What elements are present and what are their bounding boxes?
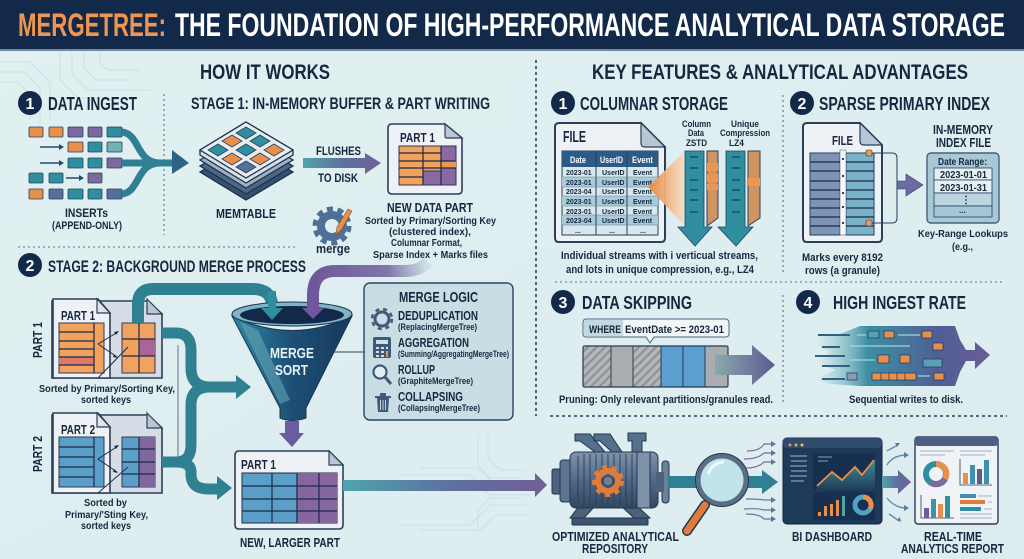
labels: unique compression: Compression — [720, 128, 770, 138]
label: real-time analytics report: REAL-TIME — [924, 529, 982, 544]
caption: part 1: Sorted by Primary/Sorting Key, — [39, 383, 175, 395]
index table: 2023-01-31 — [940, 182, 987, 194]
item: aggregation: (Summing/AggregatingMergeTree) — [398, 349, 509, 359]
columnar file document: 2023-01 — [566, 170, 592, 177]
caption: pruning: Pruning: Only relevant partitions/granules read. — [559, 394, 773, 406]
new larger part document: PART 1 — [241, 458, 276, 472]
step 2: background merge heading: 2 — [26, 258, 35, 275]
label: optimized analytical repository — [552, 529, 679, 556]
text: new data part description: Sorted by Primary/Sorting Key — [365, 215, 496, 227]
labels: unique compression: LZ4 — [729, 138, 744, 148]
caption: columnar storage: Individual streams with i verticual streams, — [561, 250, 758, 262]
feature 1: columnar storage heading — [551, 91, 728, 115]
columnar file document: UserID — [602, 170, 625, 177]
columnar file document: Event — [632, 155, 653, 165]
columnar file document: 2023-01 — [566, 199, 592, 206]
query box: WHERE — [589, 324, 621, 336]
columnar file document: UserID — [602, 189, 625, 196]
arrow: engine through magnifier to dashboard — [668, 470, 778, 494]
title: MERGETREE: — [18, 7, 166, 43]
columnar file document: ... — [640, 228, 646, 235]
caption: key-range lookups — [918, 228, 1008, 253]
step 1: data ingest heading: 1 — [26, 96, 35, 113]
arrow heads: parts into merge — [217, 305, 283, 500]
caption: part 2: Sorted by — [84, 497, 127, 509]
labels: column data: ZSTD — [686, 138, 707, 148]
sparse index file document — [803, 123, 882, 242]
partition bar — [583, 346, 728, 387]
caption: columnar storage: and lots in unique compression, e.g., LZ4 — [566, 264, 755, 276]
input part 2: PART 2 — [61, 423, 95, 437]
item: collapsing: (CollapsingMergeTree) — [398, 403, 480, 413]
label: inserts: INSERTs — [65, 208, 108, 220]
icon: merge gear: merge — [316, 242, 350, 256]
index table: Date Range: — [938, 157, 987, 168]
columnar file document: FILE — [563, 129, 586, 146]
column streams — [678, 151, 760, 246]
item: collapsing — [375, 389, 480, 413]
caption: part 2 — [65, 497, 148, 532]
columnar file document: Event — [633, 180, 653, 187]
caption: key-range lookups: Key-Range Lookups — [918, 228, 1008, 240]
input part 1 — [52, 299, 162, 378]
feature 4: high ingest heading: HIGH INGEST RATE — [833, 293, 966, 313]
feature 1: columnar storage heading: 1 — [559, 96, 568, 113]
step 1: data ingest heading — [18, 91, 137, 115]
item: rollup — [374, 362, 473, 386]
index table — [927, 153, 999, 223]
icon: orange gear — [594, 467, 622, 495]
label: optimized analytical repository: OPTIMIZED ANALYTICAL — [552, 529, 679, 544]
caption: sequential writes: Sequential writes to disk. — [849, 394, 963, 406]
arrows: parts into merge — [138, 289, 272, 489]
columnar file document: Event — [633, 218, 653, 225]
caption: part 2: sorted keys — [81, 520, 131, 532]
columnar file document: Date — [570, 155, 586, 165]
wisps to report — [887, 443, 909, 522]
label: inserts: (APPEND-ONLY) — [52, 220, 122, 232]
arrow: dashboard to report — [882, 470, 911, 494]
step 2: background merge heading — [18, 253, 306, 277]
feature 4: high ingest heading: 4 — [804, 295, 813, 312]
item: rollup: (GraphiteMergeTree) — [398, 376, 473, 386]
icon: memtable stack — [200, 122, 293, 200]
caption: key-range lookups: (e.g., — [952, 241, 973, 253]
columnar file document: ... — [609, 228, 615, 235]
item: deduplication — [372, 308, 478, 332]
columnar file document: 2023-01 — [566, 180, 592, 187]
caption: marks every 8192: Marks every 8192 — [802, 252, 883, 264]
label: bi dashboard: BI DASHBOARD — [792, 529, 872, 544]
columnar file document: 2023-01 — [566, 209, 592, 216]
columnar file document: Event — [633, 170, 653, 177]
item: collapsing: COLLAPSING — [398, 389, 463, 404]
new larger part document — [235, 451, 343, 529]
caption: part 2: Primary/'Sting Key, — [65, 509, 148, 521]
arrow: pruning — [715, 345, 775, 385]
columnar file document: 2023-04 — [566, 218, 592, 225]
label: part 1 vertical: PART 1 — [31, 322, 45, 358]
columnar file document — [555, 123, 665, 242]
item: deduplication: DEDUPLICATION — [398, 308, 478, 323]
header banner — [0, 0, 1024, 51]
item: aggregation: AGGREGATION — [398, 335, 469, 350]
icon: high ingest stream — [815, 326, 990, 386]
text: new data part description: (clustered index), — [389, 226, 471, 238]
text: new data part description: Sparse Index + Marks files — [373, 249, 488, 261]
new data part document — [388, 124, 462, 194]
icon: analytics report — [915, 437, 998, 524]
funnel: merge sort: MERGE — [270, 345, 314, 362]
step 1: data ingest heading: DATA INGEST — [48, 94, 137, 114]
labels: unique compression: Unique — [731, 119, 759, 129]
panel: merge logic — [364, 283, 513, 420]
arrow: marks to in-memory index — [872, 153, 923, 223]
columnar file document: UserID — [602, 218, 625, 225]
funnel: merge sort — [232, 291, 352, 420]
arrow: new part to repository — [343, 473, 547, 497]
arrow: flushes to disk: FLUSHES — [316, 144, 361, 158]
arrow: merge signal into funnel — [302, 262, 428, 319]
step 2: background merge heading: STAGE 2: BACKGROUND MERGE PROCESS — [48, 257, 306, 276]
section heading: how it works: HOW IT WORKS — [200, 61, 330, 84]
text: new data part description: NEW DATA PART — [387, 200, 473, 215]
item: aggregation — [373, 335, 509, 359]
feature 3: data skipping heading: 3 — [559, 295, 568, 312]
arrow: flushes to disk: TO DISK — [318, 171, 358, 185]
labels: column data — [682, 119, 711, 148]
item: deduplication: (ReplacingMergeTree) — [398, 322, 477, 332]
query box — [583, 319, 729, 343]
caption: marks every 8192 — [802, 252, 883, 277]
label: new larger part: NEW, LARGER PART — [240, 535, 340, 550]
feature 4: high ingest heading — [796, 290, 966, 314]
label: in-memory index file: IN-MEMORY — [933, 123, 994, 137]
labels: column data: Column — [682, 119, 711, 129]
funnel: merge sort: SORT — [275, 362, 308, 379]
columnar file document: Event — [633, 199, 653, 206]
columnar file document: UserID — [602, 199, 625, 206]
columnar file document: Event — [633, 189, 653, 196]
label: memtable: MEMTABLE — [216, 206, 276, 221]
text: new data part description: Columnar Format, — [391, 237, 462, 249]
index table: ... — [959, 206, 966, 215]
inserts block grid — [29, 127, 122, 199]
stage 1 heading: STAGE 1: IN-MEMORY BUFFER & PART WRITING — [191, 95, 490, 113]
text: new data part description — [365, 200, 496, 261]
sparse index file document: FILE — [832, 133, 853, 148]
data flow wisps to dashboard — [744, 441, 776, 522]
label: in-memory index file — [933, 123, 994, 150]
item: rollup: ROLLUP — [398, 362, 435, 377]
icon: magnifying glass — [687, 454, 748, 531]
icon: bi dashboard — [783, 438, 882, 524]
caption: part 1 — [39, 383, 175, 406]
columnar file document: 2023-04 — [566, 189, 592, 196]
icon: merge gear — [315, 209, 352, 256]
icon: analytical engine — [552, 433, 669, 525]
input part 2 — [52, 413, 162, 493]
label: optimized analytical repository: REPOSITORY — [582, 541, 648, 556]
arrow: flushes to disk — [303, 144, 381, 185]
label: real-time analytics report — [901, 529, 1004, 556]
feature 2: sparse primary index heading: 2 — [798, 96, 807, 113]
feature 3: data skipping heading — [551, 290, 692, 314]
columnar file document: UserID — [602, 180, 625, 187]
index table: 2023-01-01 — [940, 169, 987, 181]
label: part 2 vertical: PART 2 — [31, 436, 45, 472]
feature 2: sparse primary index heading — [790, 91, 990, 115]
feature 1: columnar storage heading: COLUMNAR STORAGE — [580, 94, 728, 114]
feature 3: data skipping heading: DATA SKIPPING — [582, 293, 692, 313]
columnar file document: UserID — [602, 209, 625, 216]
labels: unique compression — [720, 119, 770, 148]
input part 1: PART 1 — [61, 309, 95, 323]
columnar file document: ... — [575, 228, 581, 235]
caption: columnar storage — [561, 250, 758, 276]
columnar file document: UserID — [600, 155, 623, 165]
label: inserts — [52, 208, 122, 232]
query box: EventDate >= 2023-01 — [625, 324, 724, 336]
index table: ⋮ — [961, 195, 971, 206]
label: in-memory index file: INDEX FILE — [936, 136, 991, 150]
columnar file document: Event — [633, 209, 653, 216]
caption: marks every 8192: rows (a granule) — [805, 265, 880, 277]
new data part document: PART 1 — [400, 131, 435, 145]
caption: part 1: sorted keys — [81, 394, 131, 406]
orange projection cone — [648, 152, 684, 225]
arrow: funnel to new part — [279, 421, 304, 447]
labels: column data: Data — [688, 128, 705, 138]
arrow: inserts converging into memtable — [122, 132, 189, 194]
heading: merge logic: MERGE LOGIC — [399, 289, 478, 306]
